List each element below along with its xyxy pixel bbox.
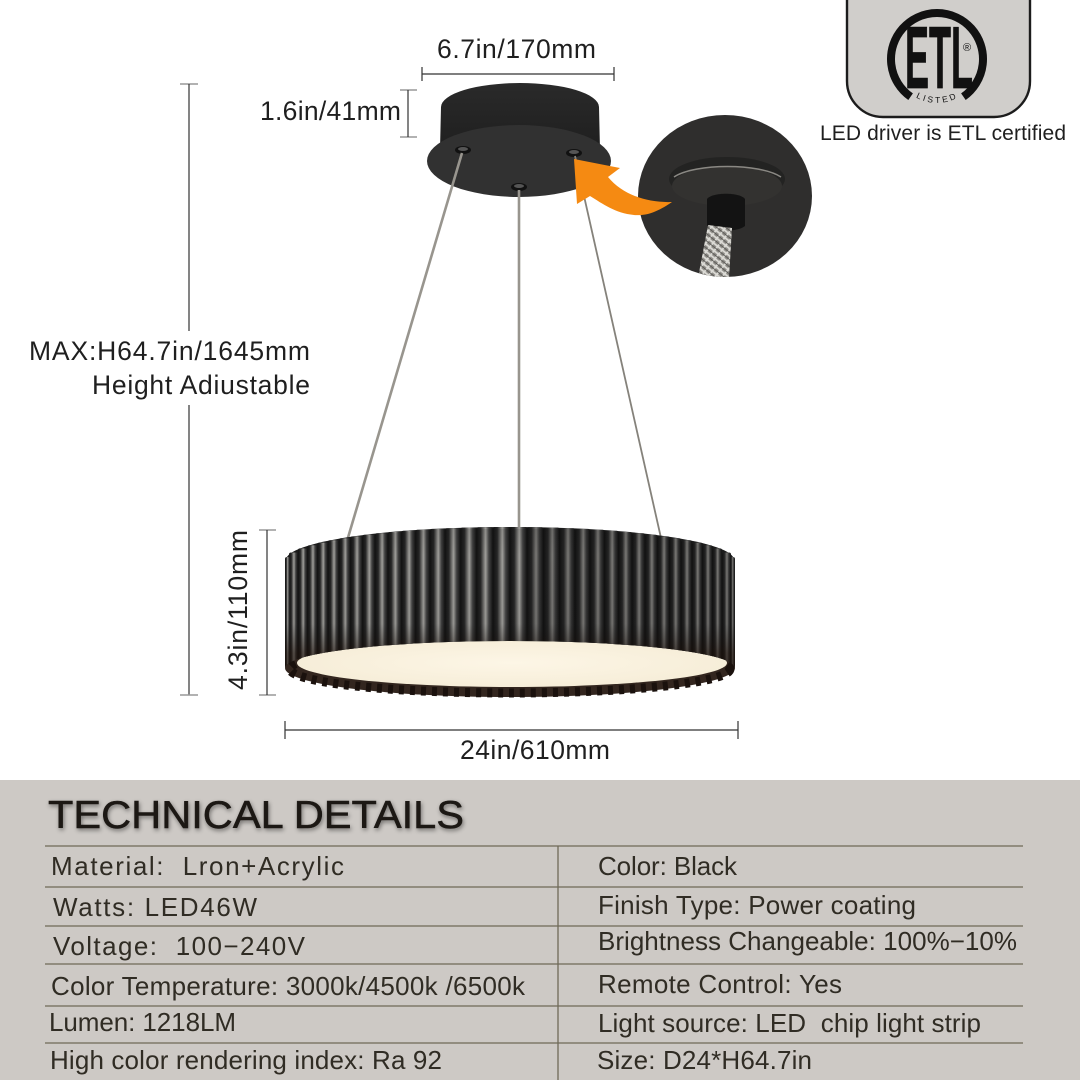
maximum height label: Height Adiustable: [92, 370, 310, 400]
glowing diffuser: [297, 639, 727, 687]
table grid: [45, 846, 1023, 1080]
pendant light ring: [285, 527, 735, 702]
ETL certification badge: [846, 0, 1032, 118]
icon: ETL listed logo: ®: [963, 42, 971, 54]
underside rim: [285, 639, 735, 697]
specs: right column: [597, 851, 1017, 1075]
specs: right column: Color: Black: [598, 851, 738, 881]
specs: right column: Finish Type: Power coating: [598, 890, 916, 920]
label: canopy height: 1.6in/41mm: [260, 96, 401, 126]
specs: left column: Watts: LED46W: [53, 892, 257, 922]
maximum height label: [29, 336, 310, 400]
canopy width dimension: [422, 34, 614, 81]
orange arrow: [574, 159, 672, 215]
ceiling canopy: [427, 83, 611, 197]
icon: ETL listed logo: [887, 8, 987, 107]
heading: TECHNICAL DETAILS: [48, 794, 464, 837]
maximum height label: MAX:H64.7in/1645mm: [29, 336, 310, 366]
specs: left column: Color Temperature: 3000k/4500k /6500k: [51, 971, 526, 1001]
screw: left: [455, 146, 471, 154]
fluted shade: [285, 527, 735, 668]
screw: right: [566, 149, 582, 157]
icon: ETL listed logo: LISTED: [916, 92, 956, 103]
specs: right column: Light source: LED chip light strip: [598, 1008, 981, 1038]
specs: right column: Remote Control: Yes: [598, 969, 842, 999]
specs: left column: Voltage: 100−240V: [53, 931, 306, 961]
screw: centre: [511, 183, 527, 191]
specs: left column: Lumen: 1218LM: [49, 1007, 236, 1037]
shade diameter dimension: [285, 721, 738, 765]
specs: right column: Brightness Changeable: 100%−10%: [598, 926, 1017, 956]
ETL certification badge: ETL: [905, 8, 973, 107]
specs: left column: Material: Lron+Acrylic: [51, 851, 344, 881]
label: shade diameter: 24in/610mm: [460, 735, 610, 765]
label: shade height: 4.3in/110mm: [223, 530, 253, 690]
shade height dimension: [223, 530, 276, 695]
detail inset: wire connector: [638, 115, 812, 278]
ETL caption: LED driver is ETL certified: [820, 122, 1066, 145]
label: canopy width: 6.7in/170mm: [437, 34, 596, 64]
panel: technical details: [0, 780, 1080, 1080]
specs: right column: Size: D24*H64.7in: [597, 1045, 812, 1075]
canopy height dimension: [260, 90, 417, 137]
specs: left column: High color rendering index: Ra 92: [50, 1045, 442, 1075]
height dimension line: [180, 84, 198, 695]
suspension wires: [347, 153, 661, 541]
specs: left column: [49, 851, 526, 1075]
